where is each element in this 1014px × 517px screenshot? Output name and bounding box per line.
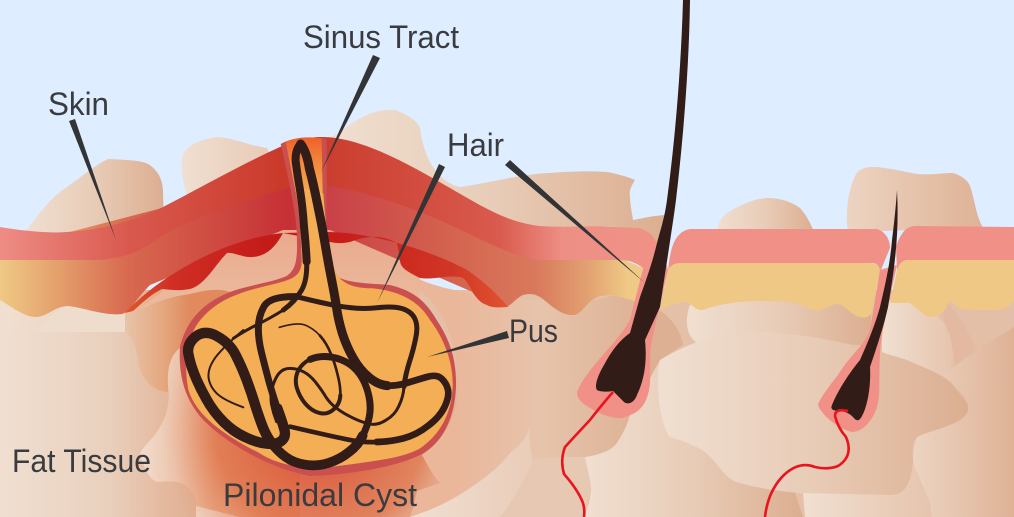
fat lobe: left follicle tan (528, 296, 683, 460)
fat lobe: around cyst (140, 340, 300, 517)
nerve line: right (765, 410, 849, 517)
label: sinus tract: Sinus Tract (303, 19, 459, 55)
fat lobe: upper right (945, 300, 1014, 350)
pointer: sinus tract (321, 55, 380, 172)
label: hair: Hair (447, 127, 504, 163)
fat lobe: bottom right (803, 463, 932, 517)
fat lobe: right of second follicle (882, 300, 954, 376)
skin upper layer (0, 137, 657, 270)
sinus tract tip (286, 138, 323, 197)
follicle sheath: right (818, 265, 897, 432)
thin strand (208, 330, 243, 407)
back tissue lobes above the skin (25, 110, 983, 260)
label: skin: Skin (48, 86, 109, 122)
fat lobe: darker wedge (943, 300, 988, 386)
follicle sheath: left (577, 240, 668, 418)
fat lobe: large central (658, 332, 968, 496)
glow around the cyst (160, 270, 480, 517)
cyst wall (180, 137, 456, 476)
strand: left from tip (296, 144, 307, 262)
dark red arch (125, 232, 508, 313)
fat lobe: far right column (913, 327, 1014, 517)
pointer: hair in cyst (377, 164, 445, 303)
strand: right from tip (301, 144, 387, 386)
pointer: hair at follicle (505, 160, 645, 283)
right skin and fat bands (660, 226, 1014, 318)
label: pus: Pus (509, 313, 558, 349)
tissue under the skin arch (125, 225, 420, 340)
fat lobe: lower middle (583, 360, 803, 517)
pointer: pus (427, 331, 509, 357)
hair shaft and bulb: right (831, 190, 898, 420)
fat lobe: upper middle (687, 295, 872, 345)
fat lobe: behind left tissue (0, 290, 240, 517)
hair shaft and bulb: left (596, 0, 690, 403)
label: pilonidal cyst: Pilonidal Cyst (223, 477, 417, 513)
fat lobe: light sliver at bottom (196, 506, 240, 517)
pointer: skin (69, 119, 116, 240)
orange lobe left of the cyst top (125, 290, 240, 330)
pilonidal cyst with sinus tract (180, 137, 456, 476)
loop: thick tangle (258, 297, 297, 408)
fat lobe: fat tissue region (0, 332, 197, 517)
matted hair (188, 144, 448, 465)
loop: upper right (297, 297, 417, 387)
fat lobe: small upper left (37, 305, 125, 333)
fat lobe: right of the cyst (410, 278, 650, 517)
nerve line: left (562, 392, 613, 517)
skin lower layer (0, 175, 643, 317)
fat lobe: lower arc right of cyst (410, 425, 590, 517)
label: fat tissue: Fat Tissue (12, 443, 151, 479)
fat tissue base (0, 270, 1014, 517)
fat lobe: under left follicle (500, 457, 590, 517)
pus filled cyst (186, 187, 453, 468)
